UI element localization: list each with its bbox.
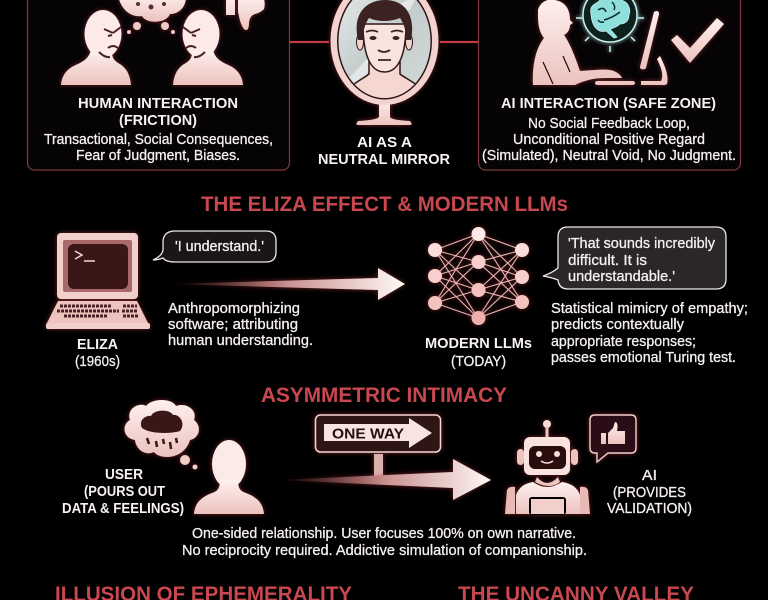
label: AI as a neutral mirror: NEUTRAL MIRROR (318, 151, 450, 168)
icon: person at computer (533, 0, 668, 85)
text: anthropomorphizing: human understanding. (168, 332, 313, 349)
icon: thought bubble with question marks (118, 0, 186, 34)
icon: one way sign: ONE WAY (332, 426, 404, 442)
connector: left panel to mirror (290, 41, 329, 43)
icon: thumbs up speech bubble (590, 415, 636, 462)
text: anthropomorphizing (168, 300, 313, 349)
label: AI provides validation: (PROVIDES (613, 484, 686, 501)
text: safe zone description: No Social Feedback Loop, (528, 115, 690, 132)
text: statistical mimicry: predicts contextually (551, 316, 684, 333)
icon: user silhouette (194, 440, 264, 514)
text: one-sided relationship (182, 525, 587, 559)
icon: glowing brain (576, 0, 644, 52)
callout: I understand: 'I understand.' (175, 238, 264, 255)
icon: one way sign (316, 415, 440, 476)
icon: ELIZA retro laptop (46, 233, 150, 329)
text: statistical mimicry (551, 300, 748, 366)
icon: thumbs down (226, 0, 265, 30)
text: safe zone description: (Simulated), Neutral Void, No Judgment. (482, 147, 736, 164)
arrow: user to AI (280, 459, 491, 500)
label: ELIZA 1960s: ELIZA (77, 336, 118, 353)
text: friction description (44, 131, 273, 164)
text: safe zone description (482, 115, 736, 164)
label: AI as a neutral mirror: AI AS A (357, 134, 412, 151)
label: user pours out data and feelings: DATA & FEELINGS) (62, 500, 184, 517)
label: AI provides validation (607, 467, 692, 517)
text: one-sided relationship: One-sided relationship. User focuses 100% on own narrative. (192, 525, 576, 542)
callout: that sounds incredibly difficult: difficult. It is (568, 252, 647, 269)
text: friction description: Fear of Judgment, Biases. (76, 147, 240, 164)
callout: that sounds incredibly difficult (543, 227, 726, 289)
label: user pours out data and feelings: USER (105, 466, 143, 483)
arrow: ELIZA to modern LLMs (170, 268, 405, 300)
label: user pours out data and feelings (62, 466, 184, 517)
label: ELIZA 1960s (75, 336, 120, 370)
text: statistical mimicry: passes emotional Turing test. (551, 349, 736, 366)
label: modern LLMs today: MODERN LLMs (425, 335, 532, 352)
callout: that sounds incredibly difficult: 'That sounds incredibly (568, 235, 715, 252)
text: anthropomorphizing: software; attributing (168, 316, 298, 333)
text: one-sided relationship: No reciprocity required. Addictive simulation of companionship. (182, 542, 587, 559)
text: statistical mimicry: appropriate responses; (551, 333, 696, 350)
heading: asymmetric intimacy: ASYMMETRIC INTIMACY (261, 384, 507, 407)
label: modern LLMs today (425, 335, 532, 370)
label: modern LLMs today: (TODAY) (451, 353, 506, 370)
icon: two angry people (61, 10, 243, 85)
icon: robot (505, 420, 590, 515)
label: AI provides validation: AI (642, 467, 657, 484)
icon: thought cloud with rain (125, 400, 199, 470)
text: statistical mimicry: Statistical mimicry of empathy; (551, 300, 748, 317)
label: user pours out data and feelings: (POURS OUT (84, 483, 165, 500)
heading: human interaction: HUMAN INTERACTION (78, 95, 238, 112)
icon: neural network (428, 227, 529, 325)
callout: I understand (153, 231, 276, 262)
panel: AI interaction (safe zone) (478, 0, 740, 170)
label: ELIZA 1960s: (1960s) (75, 353, 120, 370)
heading: human interaction: (FRICTION) (119, 112, 197, 129)
icon: AI as a neutral mirror (330, 0, 438, 125)
label: AI provides validation: VALIDATION) (607, 500, 692, 517)
icon: check mark (671, 18, 724, 63)
heading: Eliza effect and modern LLMs: THE ELIZA EFFECT & MODERN LLMs (201, 193, 568, 216)
text: friction description: Transactional, Social Consequences, (44, 131, 273, 148)
text: safe zone description: Unconditional Positive Regard (513, 131, 705, 148)
callout: that sounds incredibly difficult: understandable.' (568, 268, 675, 285)
label: AI as a neutral mirror (318, 134, 450, 168)
panel: human interaction (friction) (28, 0, 290, 170)
text: anthropomorphizing: Anthropomorphizing (168, 300, 300, 317)
heading: AI interaction: AI INTERACTION (SAFE ZONE) (501, 95, 716, 112)
connector: mirror to right panel (440, 41, 478, 43)
heading: human interaction (78, 95, 238, 129)
